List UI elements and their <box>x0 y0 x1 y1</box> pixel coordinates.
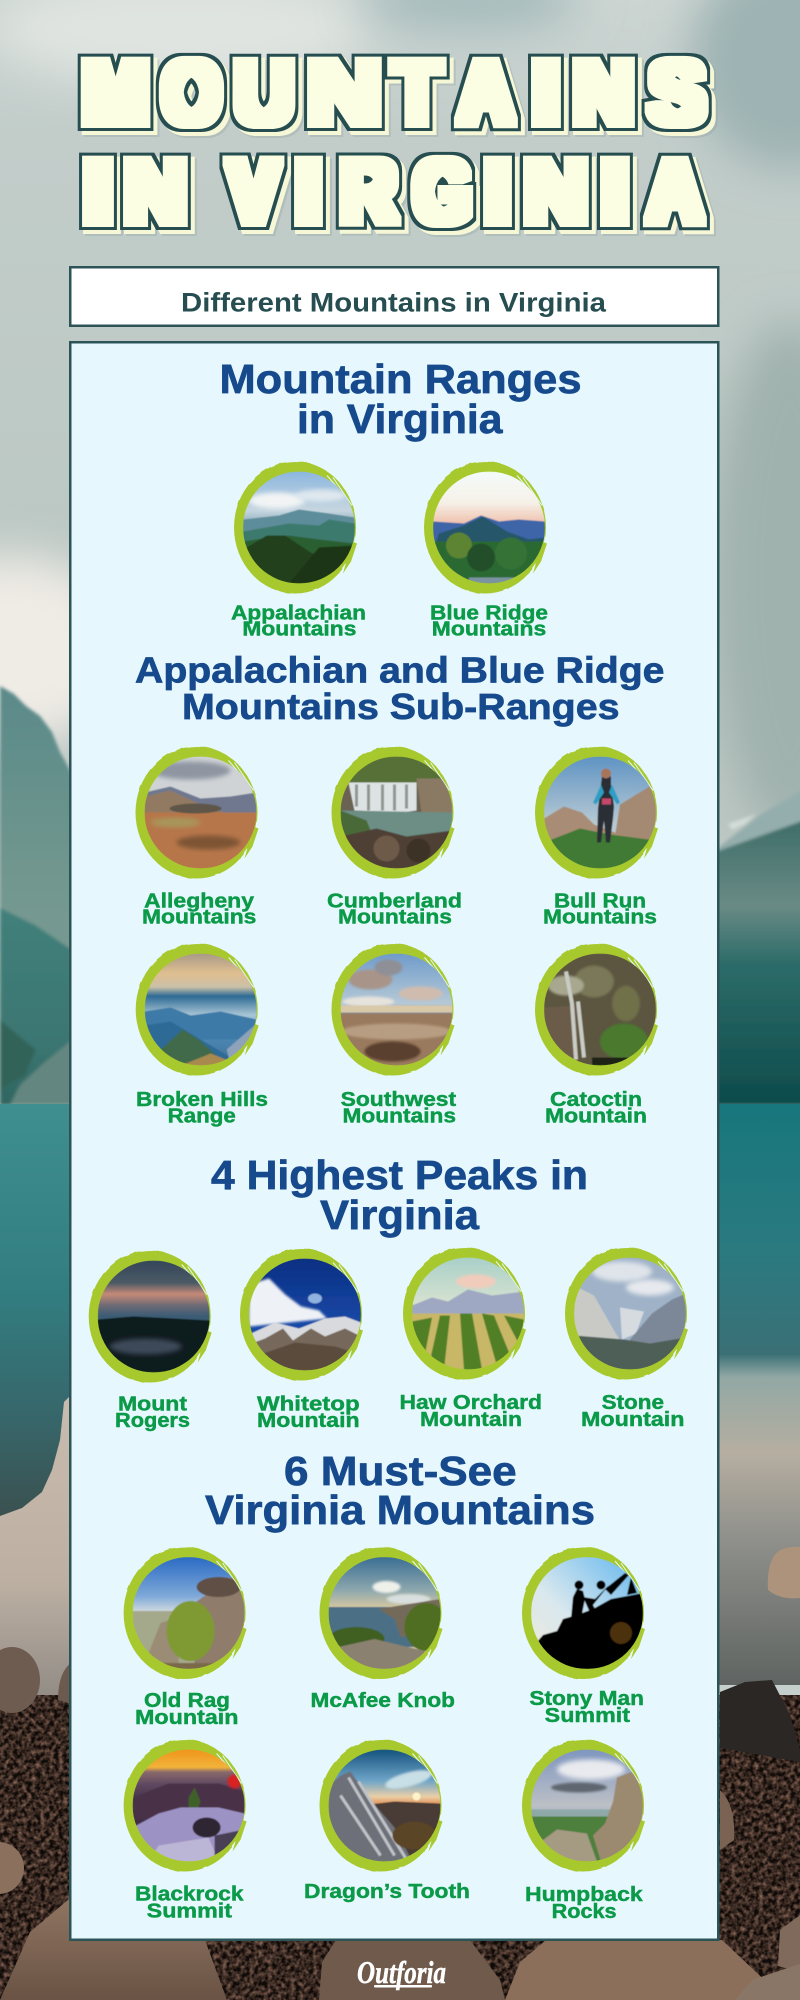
title: A <box>459 44 513 142</box>
heading: Appalachian and Blue Ridge Mountains Sub-Ranges: Appalachian and Blue Ridge <box>135 650 664 691</box>
item: Bull Run Mountains <box>535 746 658 928</box>
label: Broken Hills <box>136 1089 268 1111</box>
heading: 4 Highest Peaks in Virginia: 4 Highest Peaks in <box>211 1152 588 1198</box>
heading: 6 Must-See Virginia Mountains <box>205 1448 595 1533</box>
title: R <box>341 142 396 241</box>
label: Mount <box>118 1394 187 1416</box>
title: I <box>294 143 323 241</box>
heading: 4 Highest Peaks in Virginia: Virginia <box>320 1192 480 1238</box>
label: Mountain <box>545 1106 647 1128</box>
label: Stony Man <box>529 1688 644 1710</box>
subtitle box: Different Mountains in Virginia <box>181 288 606 318</box>
item: Whitetop Mountain <box>240 1248 363 1432</box>
title: U <box>235 44 293 143</box>
title: S <box>649 44 705 143</box>
pebble shore <box>0 1695 800 2000</box>
label: Catoctin <box>550 1089 642 1111</box>
title: V <box>229 143 278 242</box>
label <box>529 1688 644 1727</box>
label <box>136 1089 268 1128</box>
label: Mountains <box>543 906 657 928</box>
title <box>81 43 705 242</box>
title: G <box>414 143 471 242</box>
heading: Appalachian and Blue Ridge Mountains Sub-Ranges <box>135 650 664 727</box>
label <box>135 1884 244 1923</box>
item: Cumberland Mountains <box>327 746 462 928</box>
item: Stone Mountain <box>565 1248 688 1431</box>
left mountain <box>0 686 72 1105</box>
item: Catoctin Mountain <box>535 944 658 1128</box>
label <box>545 1089 647 1128</box>
heading: 6 Must-See Virginia Mountains: Virginia Mountains <box>205 1487 595 1533</box>
heading: 6 Must-See Virginia Mountains: 6 Must-See <box>284 1448 517 1494</box>
logo: Outforia: Outforia <box>357 1954 446 1990</box>
lake <box>0 1104 80 1524</box>
rocks <box>720 1680 800 1762</box>
label: Blackrock <box>135 1884 244 1906</box>
panel: mountain lists <box>70 342 718 1940</box>
label: Mountain <box>420 1409 522 1431</box>
title: N <box>124 142 187 241</box>
label <box>135 1690 238 1729</box>
title: N <box>524 142 588 241</box>
label: Summit <box>545 1705 630 1727</box>
item: Broken Hills Range <box>136 944 268 1128</box>
label: Summit <box>147 1901 232 1923</box>
label <box>115 1394 190 1432</box>
title: I <box>531 43 561 142</box>
label <box>525 1884 644 1923</box>
label: Mountain <box>581 1409 684 1431</box>
item: McAfee Knob <box>310 1547 455 1712</box>
label: Range <box>168 1106 236 1128</box>
label: Haw Orchard <box>400 1392 542 1414</box>
label: Dragon’s Tooth <box>304 1881 470 1903</box>
subtitle box <box>70 267 718 326</box>
label <box>231 602 366 640</box>
item: Blue Ridge Mountains <box>424 462 548 640</box>
title: M <box>82 43 149 142</box>
title: T <box>393 43 441 142</box>
label: Mountains <box>142 906 256 928</box>
title: A <box>648 143 702 241</box>
label <box>400 1392 542 1431</box>
label: Rogers <box>115 1410 190 1432</box>
item: Allegheny Mountains <box>136 746 258 928</box>
heading: Appalachian and Blue Ridge Mountains Sub-Ranges: Mountains Sub-Ranges <box>182 686 620 727</box>
label: Whitetop <box>257 1394 360 1416</box>
label: Mountain <box>135 1707 238 1729</box>
heading: 4 Highest Peaks in Virginia <box>211 1152 588 1238</box>
label: Mountains <box>342 1106 456 1128</box>
label: Mountains <box>242 618 356 640</box>
item: Southwest Mountains <box>332 944 456 1128</box>
label: Southwest <box>341 1089 456 1111</box>
item: Appalachian Mountains <box>231 462 366 640</box>
heading: Mountain Ranges in Virginia: Mountain Ranges <box>220 356 582 402</box>
label: Old Rag <box>144 1690 230 1712</box>
item: Mount Rogers <box>89 1250 212 1432</box>
heading: Mountain Ranges in Virginia <box>220 356 582 442</box>
label <box>543 890 657 928</box>
label: Mountain <box>257 1410 360 1432</box>
label <box>430 602 548 640</box>
label: Appalachian <box>231 602 366 624</box>
label: Allegheny <box>144 890 255 912</box>
label: Cumberland <box>327 890 462 912</box>
label <box>341 1089 456 1128</box>
item: Blackrock Summit <box>124 1740 247 1923</box>
label: Stone <box>602 1392 664 1414</box>
label: McAfee Knob <box>310 1690 455 1712</box>
item: Humpback Rocks <box>522 1740 645 1923</box>
label: Bull Run <box>554 890 646 912</box>
title: I <box>81 141 115 241</box>
title: I <box>483 143 512 241</box>
label: Humpback <box>525 1884 644 1906</box>
item: Dragon's Tooth <box>304 1740 470 1903</box>
label: Blue Ridge <box>430 602 548 624</box>
title: I <box>600 142 630 241</box>
label <box>327 890 462 928</box>
heading: Mountain Ranges in Virginia: in Virginia <box>297 396 504 442</box>
item: Haw Orchard Mountain <box>400 1248 542 1431</box>
right mountain <box>715 788 800 1105</box>
title: N <box>307 44 382 142</box>
label: Mountains <box>432 618 546 640</box>
item: Old Rag Mountain <box>124 1547 247 1729</box>
title: O <box>163 44 220 143</box>
label <box>581 1392 684 1431</box>
item: Stony Man Summit <box>522 1547 645 1727</box>
label <box>257 1394 360 1432</box>
label: Mountains <box>338 906 452 928</box>
title: N <box>573 44 634 143</box>
label <box>142 890 256 928</box>
label: Rocks <box>552 1901 617 1923</box>
